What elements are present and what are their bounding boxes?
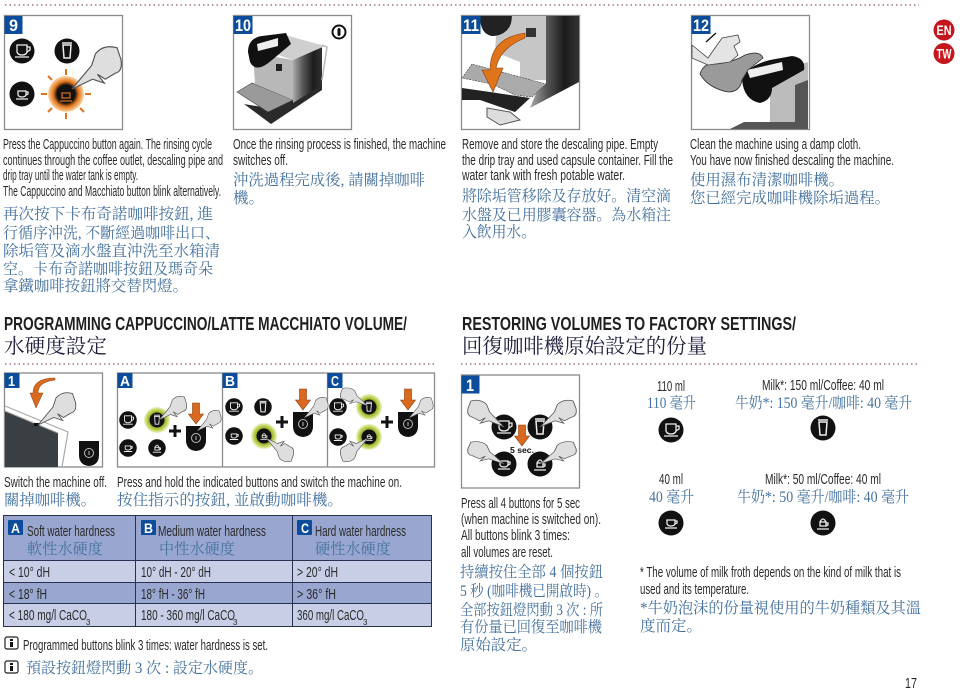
text block: step 9 English: The Cappuccino and Macchiato button blink alternatively.: [3, 183, 221, 200]
table rows: < 18° fH: [9, 586, 47, 603]
heading: programming: 水硬度設定: [4, 335, 107, 358]
table rows: 360 mg/l CaCO: [297, 607, 364, 624]
option A: [118, 373, 221, 457]
volume: 110 ml: 110 毫升: [647, 394, 696, 412]
text block: step 9 Chinese: [3, 205, 220, 295]
text block: step 11: 水盤及已用膠囊容器。為水箱注: [462, 206, 671, 224]
panel: restore step 1: 1: [466, 376, 474, 395]
language badges: [934, 20, 954, 64]
panel: step 11 illustration: 11: [463, 16, 479, 35]
column B header: B: [144, 520, 153, 536]
text block: step 9 Chinese: 除垢管及滴水盤直沖洗至水箱清: [3, 242, 220, 260]
volume: milk 50: Milk*: 50 ml/Coffee: 40 ml: [765, 471, 881, 488]
text block: step 9 English: continues through the coffee outlet, descaling pipe and: [3, 152, 223, 169]
language badges: TW: [936, 46, 952, 62]
note: programmed buttons Chinese: 預設按鈕燈閃動 3 次 : 設定水硬度。: [26, 659, 263, 677]
table rows: 10° dH - 20° dH: [141, 564, 211, 581]
text block: press all buttons: 5 秒 (咖啡機已開啟時) 。: [460, 582, 608, 600]
volume: 40 ml: [649, 471, 694, 536]
text block: step 10: [233, 136, 446, 207]
volume: milk 150: Milk*: 150 ml/Coffee: 40 ml: [762, 377, 884, 394]
text block: step 12: 使用濕布清潔咖啡機。: [690, 171, 844, 189]
text block: press all buttons: Press all 4 buttons for 5 sec: [461, 495, 580, 512]
panel: step 12 illustration: 12: [693, 16, 709, 35]
text block: step 11: 入飲用水。: [462, 223, 536, 241]
table rows: > 36° fH: [297, 586, 336, 603]
text block: step 11: [461, 136, 673, 241]
text block: step 12: Clean the machine using a damp cloth.: [690, 136, 861, 153]
heading: restoring: 回復咖啡機原始設定的份量: [462, 335, 707, 358]
panel: programming step 1: 1: [8, 373, 15, 390]
column B header: Medium water hardness: [158, 523, 266, 540]
panel: step 10 illustration: [234, 16, 352, 130]
text block: step 11: the drip tray and used capsule container. Fill the: [462, 152, 673, 169]
text block: press all buttons: 原始設定。: [460, 636, 537, 654]
option B: [222, 373, 328, 462]
heading: programming: PROGRAMMING CAPPUCCINO/LATTE MACCHIATO VOLUME/: [4, 314, 407, 334]
volume: 40 ml: 40 毫升: [649, 488, 694, 506]
panel: step 12 illustration: [692, 16, 810, 130]
table rows: 3: [363, 618, 368, 627]
text block: press all buttons: (when machine is switched on).: [461, 511, 601, 528]
table rows: 3: [233, 618, 238, 627]
footnote: [640, 564, 921, 635]
text block: step 11: Remove and store the descaling pipe. Empty: [462, 136, 658, 153]
text block: press all buttons: 持續按住全部 4 個按鈕: [460, 563, 603, 581]
column C header: [297, 520, 406, 558]
text block: step 9 Chinese: 行循序沖洗, 不斷經過咖啡出口、: [3, 224, 220, 242]
note: programmed buttons: Programmed buttons blink 3 times: water hardness is set.: [23, 637, 268, 654]
panel: restore step 1: [462, 375, 580, 488]
text block: step 9 English: Press the Cappuccino button again. The rinsing cycle: [3, 136, 212, 153]
volume: 40 ml: 40 ml: [659, 471, 683, 488]
column B header: [141, 520, 266, 558]
column C header: C: [301, 520, 309, 536]
panel: step 9 illustration: 9: [9, 16, 18, 35]
table rows: [9, 564, 368, 627]
volume: milk 150: [735, 377, 912, 440]
text block: step 9 English: [3, 136, 223, 200]
option A: A: [120, 373, 130, 390]
panel: programming A B C: [118, 373, 434, 467]
text block: press all buttons: All buttons blink 3 times:: [461, 527, 570, 544]
panel: programming step 1: [4, 373, 102, 467]
text block: press all buttons: 有份量已回復至咖啡機: [460, 618, 602, 636]
text block: step 10: switches off.: [233, 152, 288, 169]
top dotted rule: [5, 4, 919, 6]
text block: press all buttons: all volumes are reset.: [461, 544, 553, 561]
table rows: < 180 mg/l CaCO: [9, 607, 87, 624]
table rows: 3: [86, 618, 91, 627]
panel: restore step 1: 5 sec.: [510, 445, 534, 455]
column A header: A: [11, 520, 20, 536]
table rows: 180 - 360 mg/l CaCO: [141, 607, 235, 624]
text block: step 10: Once the rinsing process is finished, the machine: [233, 136, 446, 153]
panel: step 10 illustration: 10: [235, 16, 251, 35]
text block: step 10: 沖洗過程完成後, 請關掉咖啡: [233, 171, 425, 189]
text block: press and hold: [117, 474, 402, 509]
column A header: Soft water hardness: [27, 523, 115, 540]
option C: C: [331, 373, 339, 390]
volume: 110 ml: 110 ml: [657, 378, 685, 395]
text block: switch off: Switch the machine off.: [4, 474, 107, 491]
table rows: 18° fH - 36° fH: [141, 586, 205, 603]
text block: step 12: [690, 136, 894, 207]
language badges: EN: [936, 22, 952, 38]
text block: step 11: 將除垢管移除及存放好。清空滴: [462, 187, 671, 205]
footnote: *牛奶泡沫的份量視使用的牛奶種類及其溫: [640, 599, 921, 617]
text block: step 9 Chinese: 拿鐵咖啡按鈕將交替閃燈。: [3, 277, 188, 295]
heading: restoring: RESTORING VOLUMES TO FACTORY SETTINGS/: [462, 314, 796, 334]
text block: press all buttons: [460, 495, 608, 654]
column B header: 中性水硬度: [159, 540, 235, 558]
panel: step 9 illustration: [4, 16, 122, 130]
volume: milk 50: [737, 471, 909, 536]
column C header: 硬性水硬度: [315, 540, 391, 558]
panel: step 11 illustration: [462, 16, 580, 130]
text block: switch off: 關掉咖啡機。: [4, 491, 96, 509]
column A header: 軟性水硬度: [27, 540, 103, 558]
table: water hardness: [4, 516, 432, 627]
text block: press and hold: Press and hold the indicated buttons and switch the machine on.: [117, 474, 402, 491]
heading: programming: [4, 314, 407, 358]
column A header: [8, 520, 115, 558]
volume: milk 150: 牛奶*: 150 毫升/咖啡: 40 毫升: [735, 394, 912, 412]
text block: press all buttons: 全部按鈕燈閃動 3 次 : 所: [460, 601, 603, 619]
text block: switch off: [4, 474, 107, 509]
table rows: > 20° dH: [297, 564, 338, 581]
text block: step 12: 您已經完成咖啡機除垢過程。: [690, 189, 890, 207]
heading: restoring: [462, 314, 796, 358]
option C: [328, 373, 433, 462]
table rows: < 10° dH: [9, 564, 50, 581]
footnote: 度而定。: [640, 617, 702, 635]
text block: step 9 Chinese: 再次按下卡布奇諾咖啡按鈕, 進: [3, 205, 213, 223]
option B: B: [225, 373, 235, 390]
text block: step 9 Chinese: 空。卡布奇諾咖啡按鈕及瑪奇朵: [3, 260, 213, 278]
text block: step 11: water tank with fresh potable water.: [461, 167, 625, 184]
footnote: used and its temperature.: [640, 581, 749, 598]
column C header: Hard water hardness: [315, 523, 406, 540]
volume: milk 50: 牛奶*: 50 毫升/咖啡: 40 毫升: [737, 488, 909, 506]
text block: press and hold: 按住指示的按鈕, 並啟動咖啡機。: [117, 491, 343, 509]
text block: step 10: 機。: [233, 189, 264, 207]
text block: step 9 English: drip tray until the water tank is empty.: [3, 167, 138, 184]
volume: 110 ml: [647, 378, 696, 442]
note: programmed buttons: [5, 637, 268, 654]
